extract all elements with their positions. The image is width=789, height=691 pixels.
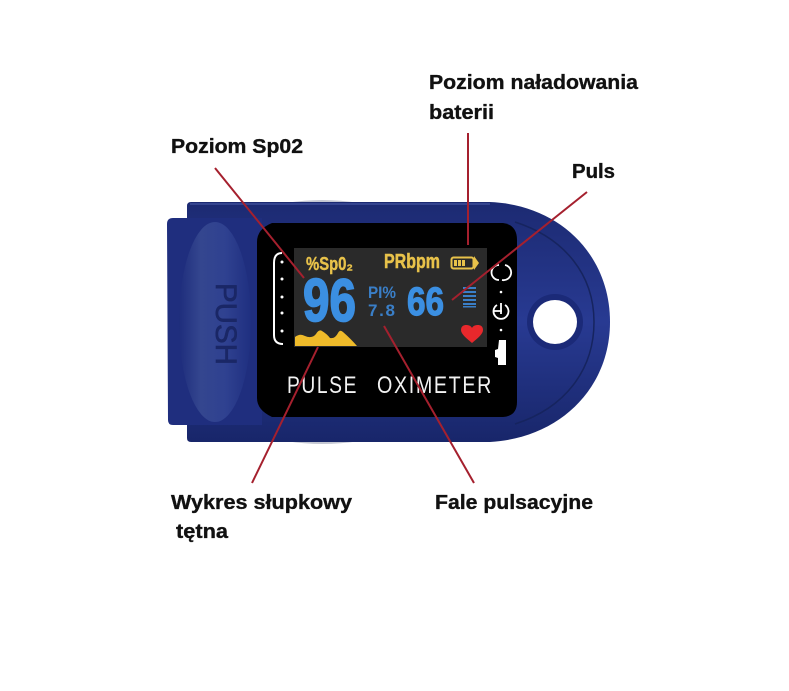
label: battery level: Poziom naładowania: [429, 72, 639, 94]
oximeter device: [167, 200, 610, 444]
heart icon: [461, 325, 483, 343]
device back shell: [187, 202, 610, 442]
push flap: [167, 218, 262, 425]
device name: PULSE: [287, 372, 358, 399]
PI label: PI%: [368, 283, 396, 302]
SpO2 value: 96: [303, 267, 356, 334]
PI value: 7.8: [368, 301, 395, 320]
label: battery level: baterii: [429, 102, 494, 124]
power icon: [493, 303, 508, 319]
label: pulse bar chart: tętna: [176, 521, 229, 543]
leader lines: [215, 133, 587, 483]
SpO2 label: %Sp0₂: [306, 254, 353, 274]
label: SpO2 level: Poziom Sp02: [171, 136, 303, 158]
screen: [257, 223, 517, 417]
keyring hole: [527, 294, 583, 350]
device name: [287, 372, 493, 399]
mode icon: [492, 265, 511, 280]
signal bars: [463, 287, 476, 308]
label: pulse bar chart: Wykres słupkowy: [171, 492, 353, 514]
label: pulse: Puls: [572, 161, 615, 183]
left bracket and dots: [274, 253, 284, 344]
PRbpm label: PRbpm: [384, 251, 440, 273]
top and bottom buttons: [285, 200, 360, 444]
device name: OXIMETER: [377, 372, 493, 399]
pulse value: 66: [407, 280, 444, 324]
battery icon: [452, 256, 479, 270]
display panel: [294, 248, 487, 347]
label: pulse waves: Fale pulsacyjne: [435, 492, 593, 514]
push label: PUSH: [209, 283, 242, 365]
pulse waveform: [295, 330, 357, 346]
finger icon: [495, 340, 506, 365]
